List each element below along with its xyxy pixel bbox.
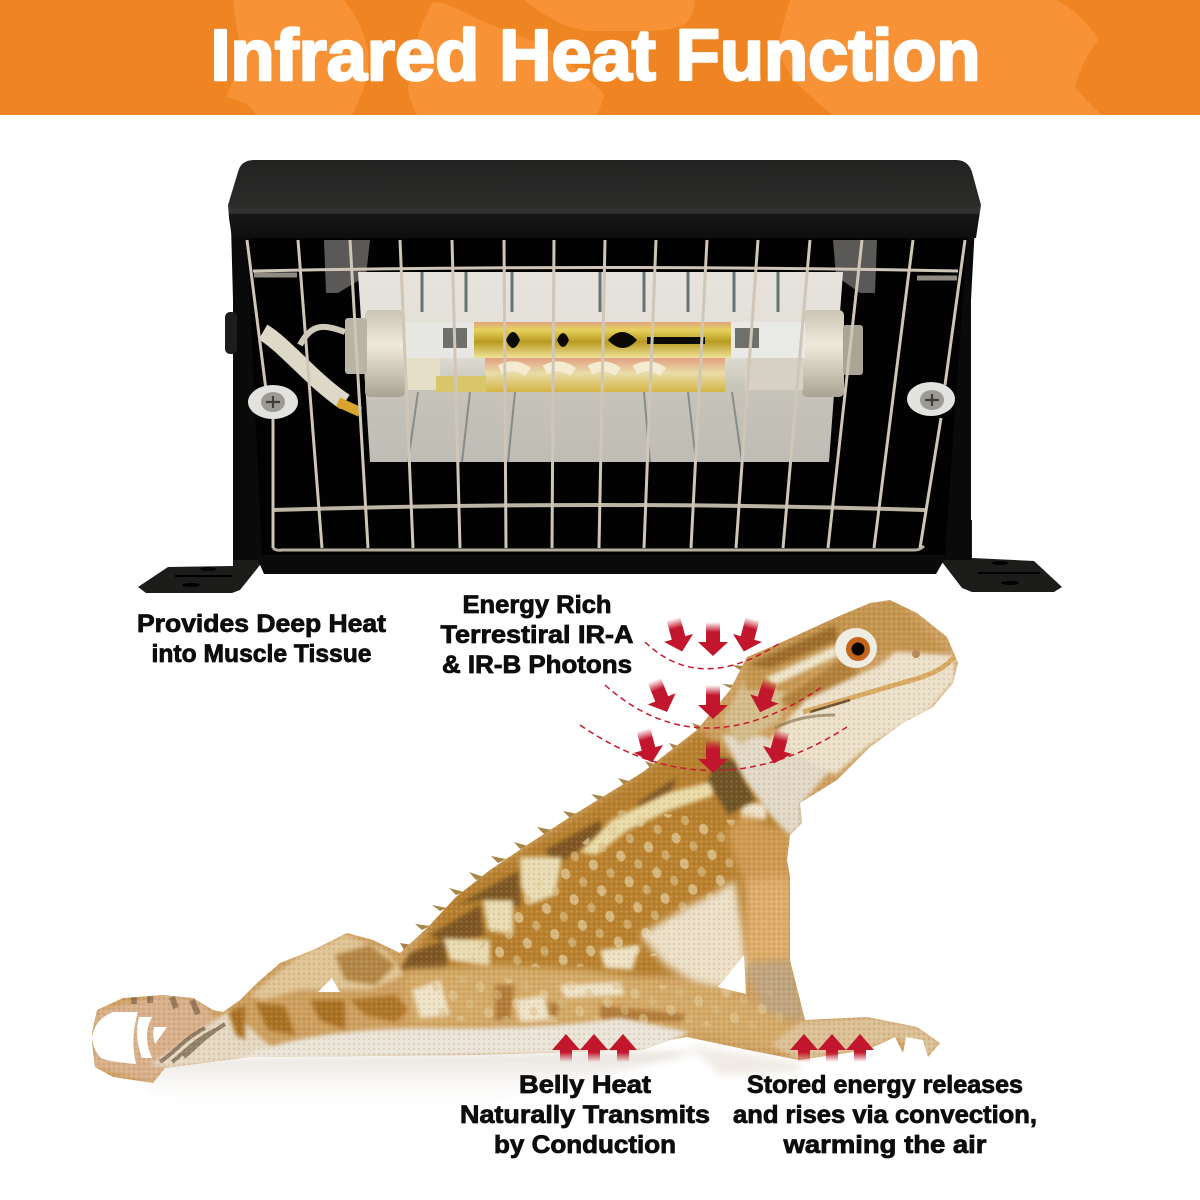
label: photons: & IR-B Photons	[442, 651, 632, 679]
hip and thigh	[405, 965, 800, 1048]
belly	[240, 1018, 690, 1060]
left mounting foot	[138, 530, 260, 593]
label: belly heat	[460, 1071, 710, 1159]
label: deep heat: Provides Deep Heat	[137, 610, 387, 638]
heater lamp	[138, 160, 1062, 593]
upward convection arrows	[790, 1034, 874, 1062]
neck frill	[722, 680, 785, 745]
label: belly heat: Belly Heat	[519, 1071, 652, 1099]
threaded bolts	[254, 275, 957, 278]
label: stored energy: and rises via convection,	[733, 1101, 1037, 1129]
toe gaps	[92, 1012, 167, 1064]
hood	[228, 160, 981, 238]
wiring	[263, 332, 345, 402]
mounting brackets	[324, 240, 370, 293]
lizard colour patches	[90, 600, 960, 1090]
right screw	[907, 382, 955, 416]
label: belly heat: by Conduction	[494, 1131, 676, 1159]
label: stored energy	[733, 1071, 1037, 1159]
reflector	[358, 272, 843, 462]
head top	[745, 600, 955, 690]
downward heat arrows	[629, 615, 797, 773]
heat waves	[580, 642, 847, 771]
label: deep heat: into Muscle Tissue	[152, 640, 372, 668]
flank	[400, 730, 790, 985]
label: belly heat: Naturally Transmits	[460, 1101, 710, 1129]
label: photons	[440, 591, 634, 679]
hind thigh bands	[228, 1000, 345, 1040]
bearded dragon	[90, 600, 960, 1090]
interior	[247, 238, 967, 555]
front arm	[745, 875, 790, 960]
dewlap	[722, 735, 835, 835]
eye	[835, 628, 877, 668]
left screw	[248, 385, 298, 419]
label: photons: Terrestiral IR-A	[440, 621, 634, 649]
lamp tubes	[345, 310, 863, 397]
back spines	[400, 665, 744, 950]
title: Infrared Heat Function	[210, 16, 980, 96]
label: stored energy: Stored energy releases	[747, 1071, 1023, 1099]
side arms and body	[231, 225, 975, 574]
upward belly arrows	[552, 1034, 637, 1062]
toes of front foot	[770, 1017, 940, 1060]
lizard body silhouette	[92, 600, 958, 1083]
jaw	[770, 652, 955, 775]
neck dark	[708, 757, 755, 815]
dark back bands	[400, 777, 677, 970]
right mounting foot	[942, 520, 1062, 592]
tail and toes	[92, 995, 250, 1083]
lumpy scales	[470, 810, 735, 970]
pale lower flank	[640, 880, 748, 990]
banner	[0, 0, 1200, 115]
lizard reflection	[145, 1045, 800, 1112]
leg gaps	[318, 955, 746, 994]
nostril	[912, 650, 920, 658]
label: stored energy: warming the air	[782, 1131, 987, 1159]
scale texture	[90, 600, 960, 1090]
wire guard	[247, 240, 965, 550]
pale back markings	[580, 780, 717, 855]
side knob	[225, 312, 237, 354]
label: deep heat	[137, 610, 387, 668]
shoulder	[727, 815, 790, 885]
label: photons: Energy Rich	[462, 591, 612, 619]
